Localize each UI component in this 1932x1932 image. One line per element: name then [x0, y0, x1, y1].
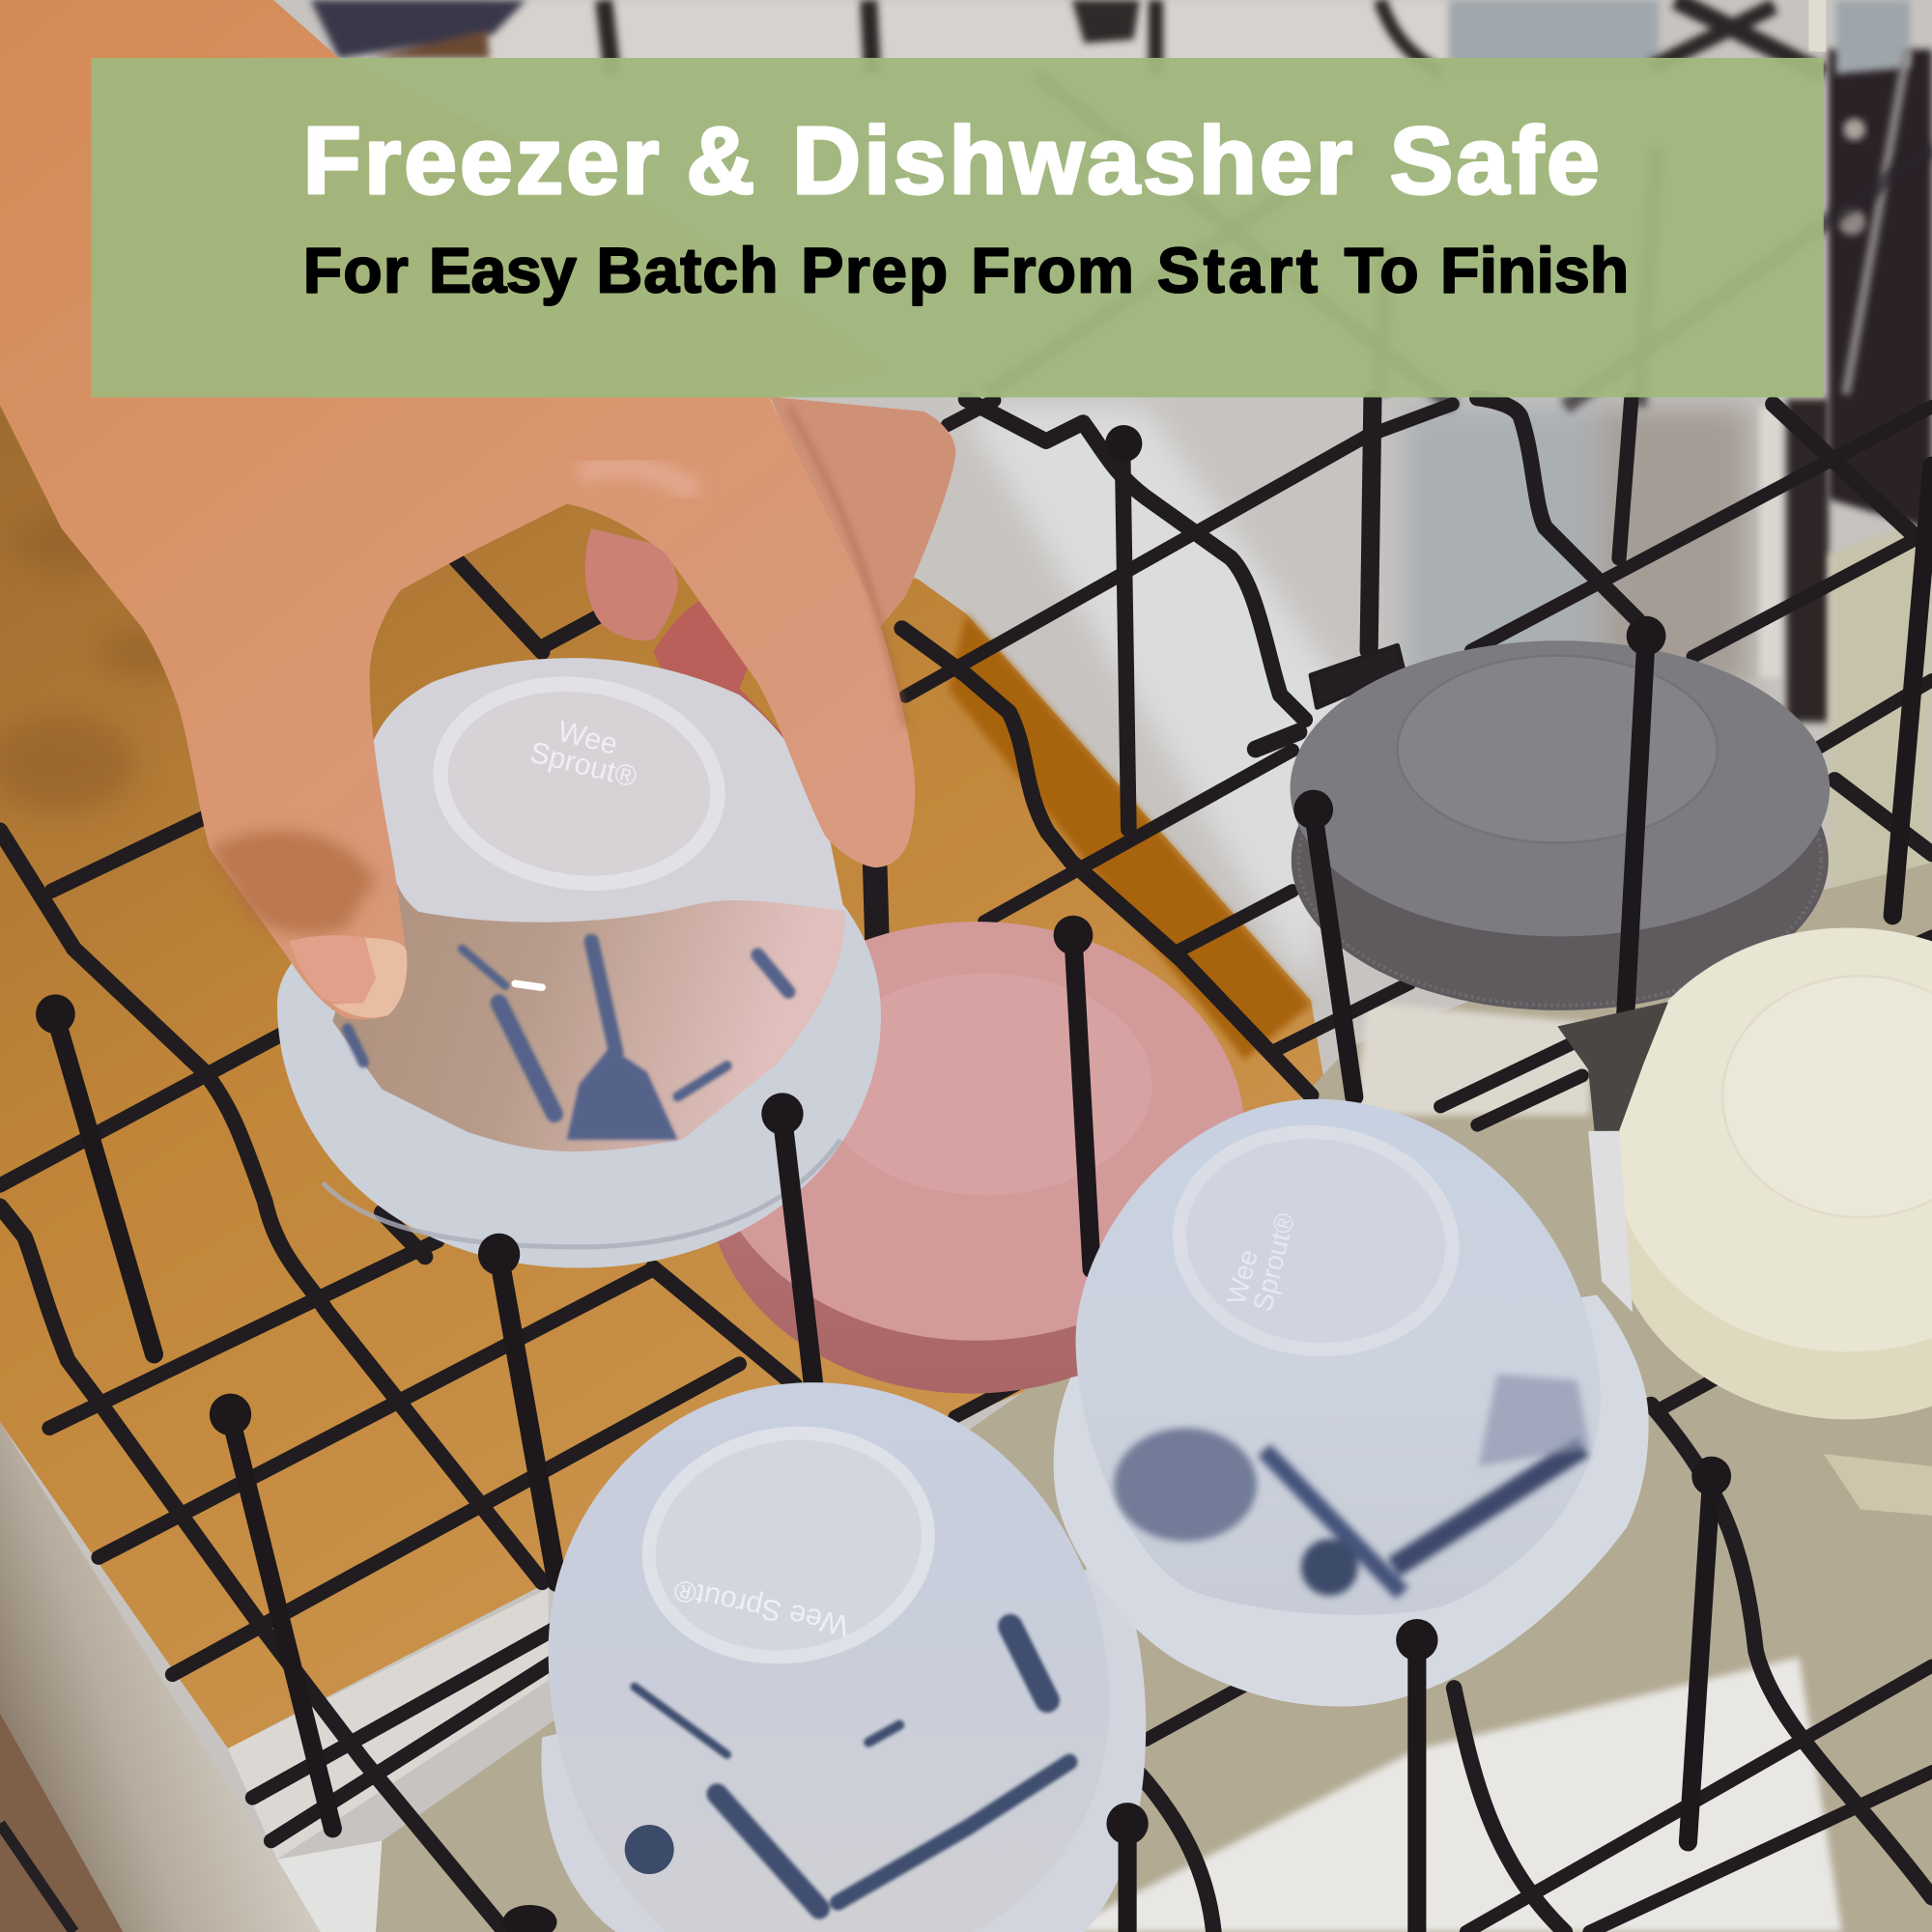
lid: pink [707, 922, 1244, 1394]
clear bowl held in hand [277, 658, 881, 1267]
banner subheading: Easy [429, 235, 577, 306]
rack wires [0, 398, 1932, 1932]
clear bowl lower centre [541, 1382, 1146, 1932]
banner heading: Freezer [303, 107, 662, 213]
embossed brand mark: Sprout® [526, 736, 640, 794]
banner subheading: Start [1157, 235, 1321, 306]
hand: back fingers [585, 397, 955, 746]
rear rack tines [36, 425, 1932, 1842]
banner panel [91, 58, 1824, 397]
embossed brand mark: Sprout® [1247, 1209, 1300, 1314]
blurred top rack seen behind banner [310, 0, 1932, 407]
banner subheading: For [303, 235, 410, 306]
banner subheading: Prep [801, 235, 950, 306]
banner subheading: From [971, 235, 1135, 306]
banner heading: & [686, 107, 758, 213]
embossed brand mark: Wee Sprout® [670, 1573, 852, 1642]
lid: grey [1290, 640, 1830, 1010]
embossed brand mark: Wee [554, 715, 621, 761]
embossed brand mark: Wee [1221, 1247, 1264, 1307]
front rack tines [502, 1619, 1438, 1932]
banner heading: Safe [1390, 107, 1603, 213]
banner subheading: Batch [596, 235, 780, 306]
banner subheading: Finish [1440, 235, 1629, 306]
tines in front of held bowl [478, 1093, 813, 1582]
banner heading: Dishwasher [792, 107, 1355, 213]
lid: cream [1608, 927, 1932, 1419]
banner subheading: To [1345, 235, 1420, 306]
hand [0, 0, 915, 1019]
clear bowl right [1054, 1099, 1649, 1707]
